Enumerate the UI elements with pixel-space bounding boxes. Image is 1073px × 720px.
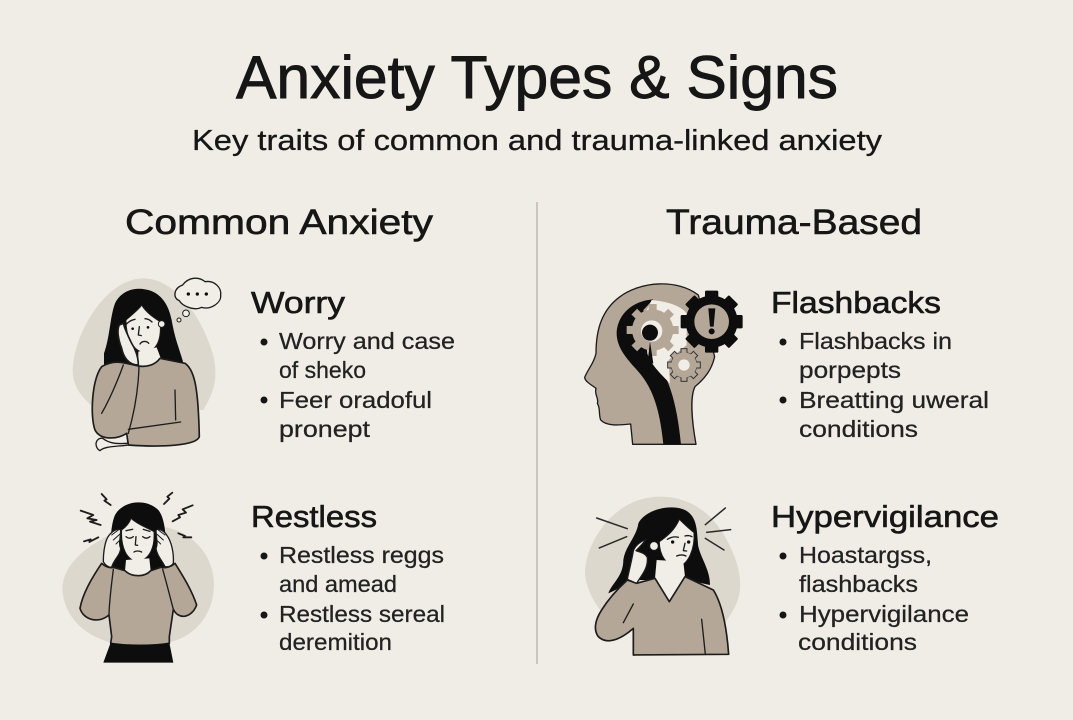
icon: alert rays [597,508,731,550]
bullets: hypervigilance: conditions [798,629,917,655]
illustration: alert woman pointing at head [585,497,740,655]
gear: small tan gear [668,349,700,381]
heading: flashbacks: Flashbacks [771,285,941,320]
gear: large tan gear [627,304,679,363]
panel: common anxiety [62,203,455,663]
bullets: flashbacks: Breatting uweral [799,387,989,413]
bullets: flashbacks: porpepts [799,357,901,383]
bullets: worry: of sheko [279,357,366,383]
heading: trauma-based: Trauma-Based [666,203,922,242]
sub-panel: worry [251,285,455,442]
bullets: restless: and amead [279,571,397,597]
bullets: hypervigilance: Hypervigilance [799,601,969,627]
heading: restless: Restless [251,499,377,534]
bullets: worry [260,328,455,442]
bullets: worry: Worry and case [279,328,455,354]
icon: thought bubble [175,278,221,322]
sub-panel: hypervigilance [771,499,999,655]
icon: black warning gear [681,291,743,353]
bullets: hypervigilance: Hoastargss, [799,542,932,568]
subtitle: Key traits of common and trauma-linked anxiety [192,125,883,157]
illustration: worried woman with thought bubble [73,278,221,451]
panel: trauma-based [585,203,999,655]
bullets: hypervigilance: flashbacks [799,571,918,597]
illustration: head with gears and warning [585,284,743,444]
heading: hypervigilance: Hypervigilance [771,499,999,534]
heading: worry: Worry [251,285,346,320]
illustration: woman holding head with stress bolts [62,493,214,663]
bullets: hypervigilance [780,542,969,655]
bullets: restless: Restless reggs [279,542,444,568]
bullets: worry: Feer oradoful [279,387,432,413]
bullets: restless: Restless sereal [279,601,445,627]
sub-panel: restless [251,499,445,655]
bullets: flashbacks: Flashbacks in [799,328,952,354]
bullets: restless: deremition [279,629,392,655]
bullets: flashbacks: conditions [799,416,918,442]
icon: stress bolts [81,493,193,542]
title: Anxiety Types & Signs [236,44,838,111]
sub-panel: flashbacks [771,285,989,442]
bullets: worry: pronept [279,416,371,442]
bullets: flashbacks [780,328,989,442]
heading: common anxiety: Common Anxiety [125,203,434,242]
bullets: restless [260,542,445,655]
